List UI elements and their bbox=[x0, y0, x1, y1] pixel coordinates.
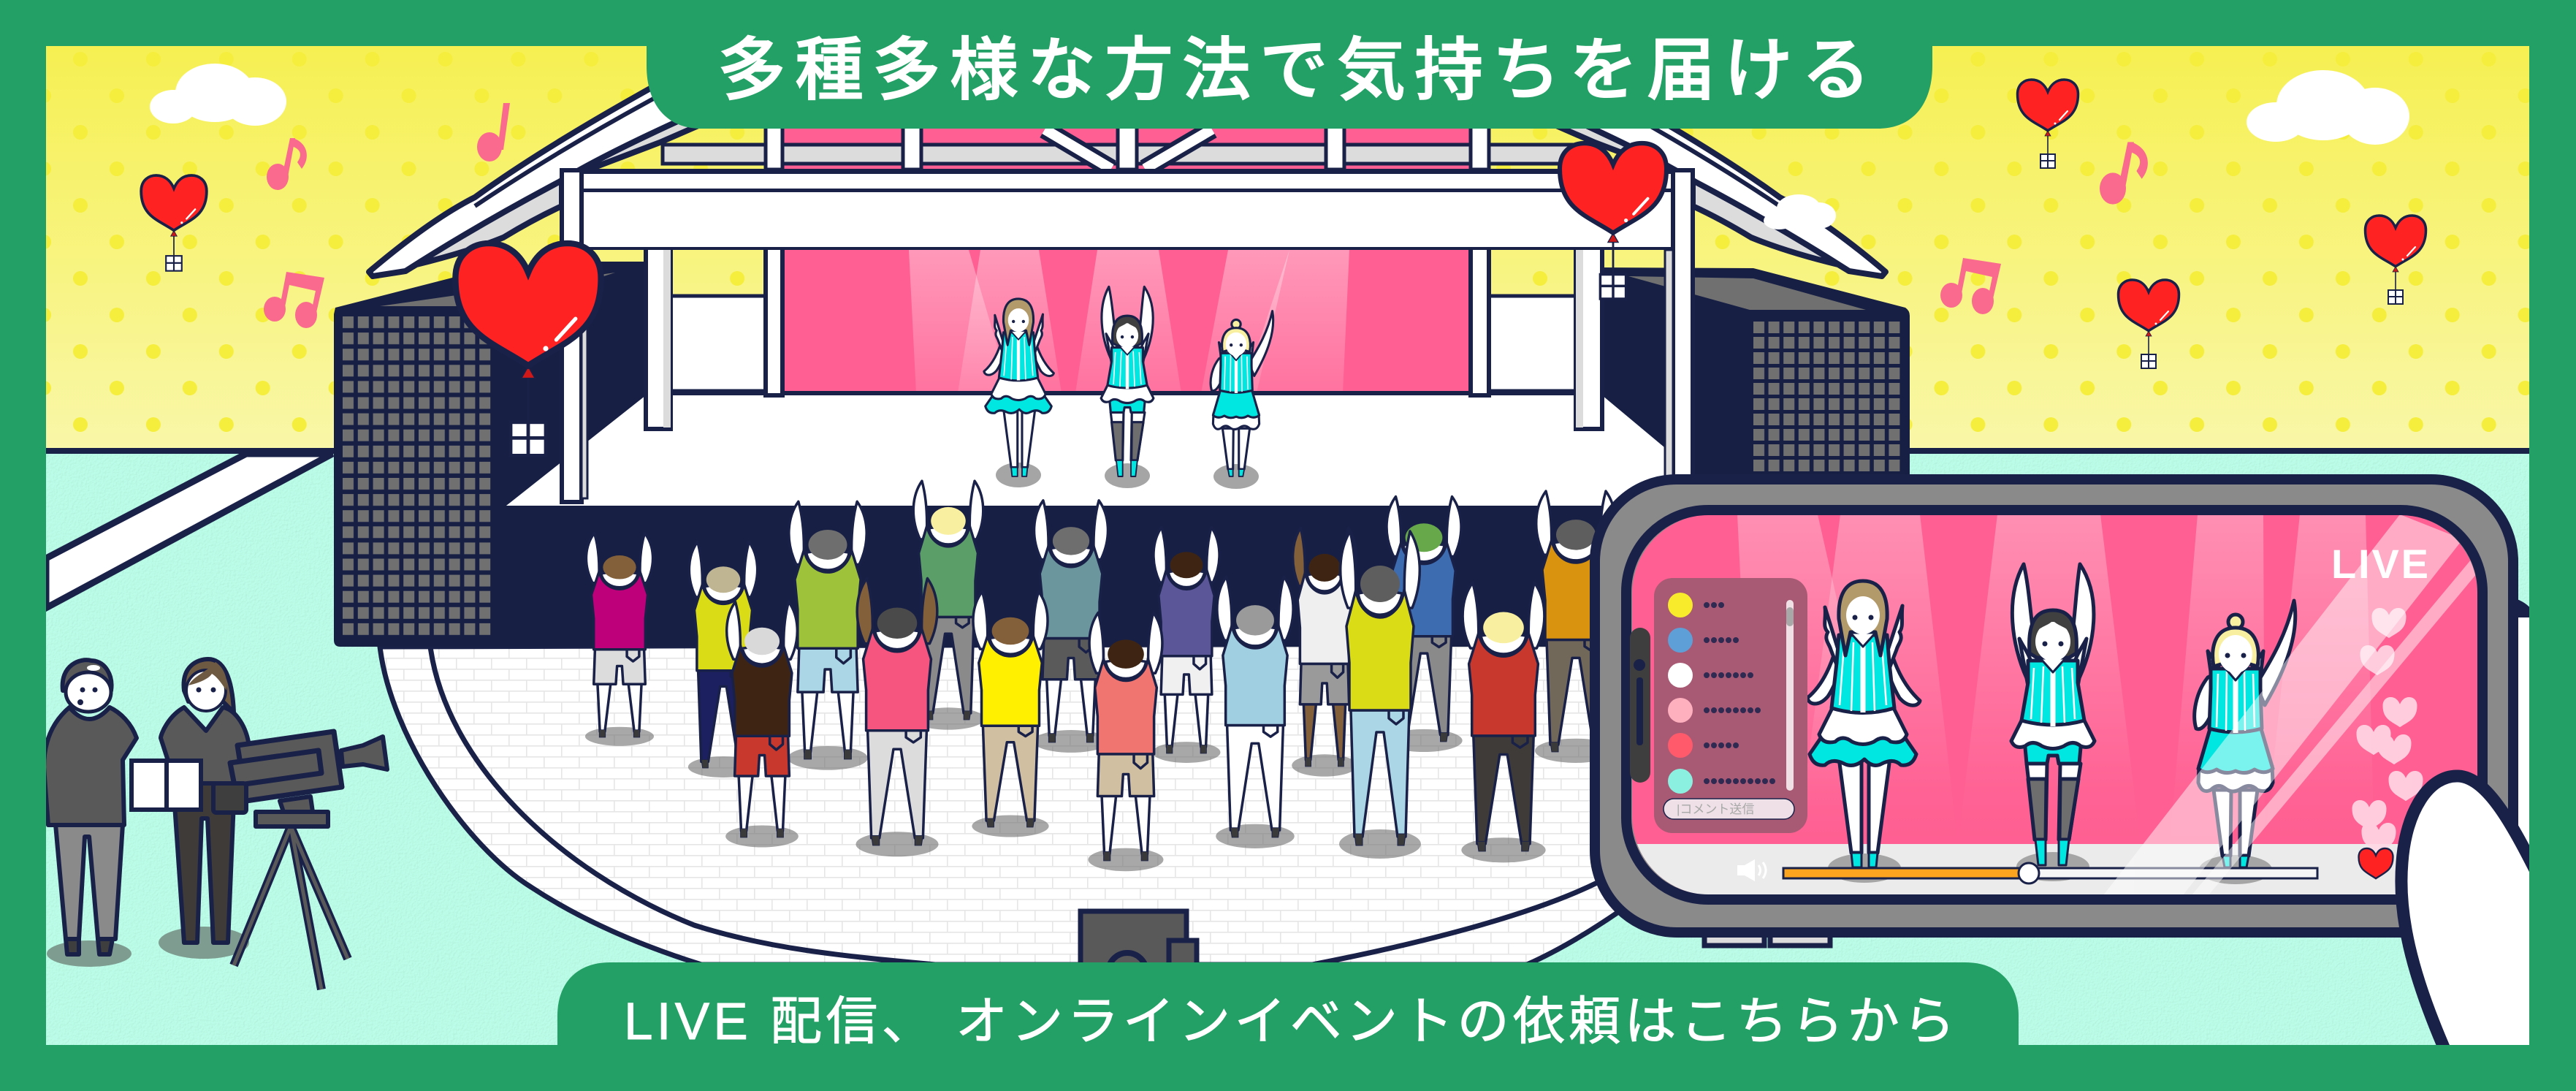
road strip bbox=[46, 454, 332, 608]
phone side camera notch bbox=[1630, 628, 1650, 783]
glass glare bbox=[2103, 514, 2477, 895]
horizon line bbox=[46, 448, 2529, 454]
phone screen bezel bbox=[1626, 510, 2482, 900]
stage outer posts bbox=[562, 170, 1693, 502]
hand: thumb bbox=[2401, 776, 2542, 1052]
camera crew: woman with headset bbox=[159, 659, 249, 959]
roof: left bbox=[369, 58, 734, 276]
cloud: right bbox=[2247, 70, 2409, 145]
ground: mint field with texture bbox=[46, 451, 2529, 1045]
plaza: brick floor bbox=[380, 643, 1753, 965]
audience crowd bbox=[585, 481, 1617, 871]
floating hearts bbox=[2352, 608, 2423, 853]
roof: right bbox=[1520, 58, 1886, 276]
phone screen contents bbox=[1632, 514, 2477, 895]
sky panel with polka dots bbox=[46, 46, 2529, 449]
LIVE label: LIVE bbox=[2331, 541, 2428, 587]
stage back edge line bbox=[646, 391, 1602, 395]
seek bar bbox=[1783, 863, 2317, 883]
cloud: left bbox=[150, 64, 286, 126]
idols on stage bbox=[984, 286, 1273, 489]
small cloud on roof bbox=[1764, 194, 1836, 229]
equipment box on floor bbox=[1081, 911, 1197, 991]
stage inner posts bbox=[646, 247, 1602, 429]
speaker: right bbox=[1601, 267, 1910, 650]
bottom pill bbox=[557, 962, 2019, 1052]
stage spotlights bbox=[909, 250, 1349, 393]
camera crew: operator with cap bbox=[44, 660, 137, 967]
phone bbox=[1595, 479, 2513, 932]
hand: fingers behind phone bbox=[2510, 597, 2539, 906]
comment panel bbox=[1654, 578, 1807, 833]
video camera on tripod bbox=[213, 731, 387, 989]
like heart button bbox=[2358, 848, 2393, 878]
hand: back finger highlight bbox=[2518, 617, 2540, 866]
small balloons with gift boxes bbox=[141, 80, 2426, 368]
stage top beam bbox=[582, 169, 1673, 250]
stage truss and back wall bbox=[663, 124, 1576, 391]
bottom text: LIVE 配信、 オンラインイベントの依頼はこちらから bbox=[624, 993, 1955, 1051]
music notes bbox=[264, 103, 2148, 328]
phone body bbox=[1595, 479, 2513, 932]
comment panel: |コメント送信 bbox=[1677, 802, 1754, 816]
volume icon bbox=[1737, 859, 1766, 881]
boxes under phone bbox=[1704, 928, 1830, 946]
stage floor bbox=[506, 395, 1673, 506]
title text: 多種多様な方法で気持ちを届ける bbox=[717, 31, 1870, 108]
large balloon: left bbox=[455, 243, 601, 455]
stage front wall bbox=[492, 506, 1753, 647]
speaker: left bbox=[334, 262, 646, 647]
title pill bbox=[647, 0, 1932, 129]
phone idols bbox=[1807, 564, 2295, 884]
script book bbox=[132, 761, 201, 810]
large balloon: right bbox=[1560, 143, 1666, 299]
plaza inner curve bbox=[430, 647, 1636, 965]
